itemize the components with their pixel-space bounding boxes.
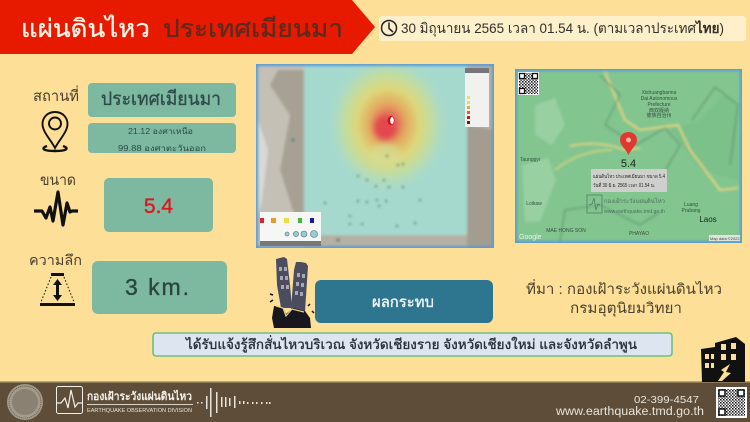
location map [515, 69, 742, 243]
icon: clock [382, 20, 396, 36]
date text: 30 มิถุนายน 2565 เวลา 01.54 น. (ตามเวลาประเทศไทย) [401, 19, 724, 37]
intensity legend [465, 68, 489, 127]
division name english: EARTHQUAKE OBSERVATION DIVISION [87, 408, 192, 414]
map caption box: วันที่ 30 มิ.ย. 2565 เวลา 01.54 น. [593, 182, 655, 189]
division logo icon [56, 386, 82, 414]
panel: impact [315, 280, 493, 323]
impact description banner: ได้รับแจ้งรู้สึกสั่นไหวบริเวณ จังหวัดเชียงราย จังหวัดเชียงใหม่ และจังหวัดลำพูน [185, 335, 637, 353]
map place labels: Xishuangbanna [642, 90, 677, 96]
map pin [620, 132, 637, 155]
panel: depth: 3 km. [125, 274, 189, 300]
panel: coordinates [88, 123, 236, 153]
icon: depth [40, 273, 75, 306]
icon: seismic wave [34, 192, 78, 225]
header banner [0, 0, 375, 54]
map place labels: Loikaw [526, 201, 542, 207]
map place labels: Prabang [682, 208, 701, 214]
department seal [7, 384, 43, 420]
map place labels: PHAYAO [629, 231, 649, 237]
panel: impact: ผลกระทบ [372, 294, 434, 311]
panel: magnitude: 5.4 [144, 195, 173, 218]
map credit: Map data ©2022 [710, 236, 740, 241]
QR code: footer [716, 387, 747, 418]
QR code: map [518, 72, 539, 95]
map watermark: www.earthquake.tmd.go.th [604, 209, 665, 215]
source text: กรมอุตุนิยมวิทยา [570, 301, 682, 317]
map caption box: แผ่นดินไหว ประเทศเมียนมา ขนาด 5.4 [593, 173, 665, 180]
footer bar [0, 381, 750, 422]
map watermark: กองเฝ้าระวังแผ่นดินไหว [604, 197, 665, 205]
panel: country [88, 83, 236, 117]
source text [526, 279, 722, 317]
map magnitude: 5.4 [621, 158, 636, 170]
Google mark: Google [519, 234, 542, 241]
sound wave decoration [197, 388, 270, 417]
panel: coordinates: 21.12 องศาเหนือ [128, 127, 193, 136]
map place labels [520, 90, 701, 237]
website: www.earthquake.tmd.go.th [555, 406, 704, 418]
map place labels: Taunggyi [520, 157, 540, 163]
icon: cracked building [701, 337, 745, 382]
icon: location pin [42, 112, 68, 151]
source text: ที่มา : กองเฝ้าระวังแผ่นดินไหว [526, 279, 722, 298]
epicentre intensity map [256, 64, 494, 248]
map place labels: 傣族自治州 [646, 112, 672, 119]
date bar [379, 16, 746, 41]
icon: collapsing buildings [270, 257, 314, 328]
impact description banner [153, 333, 672, 356]
location label: สถานที่ [33, 85, 79, 105]
title: country: ประเทศเมียนมา [163, 15, 343, 43]
division name: กองเฝ้าระวังแผ่นดินไหว [87, 389, 192, 403]
panel: depth [92, 261, 227, 314]
map place labels: MAE HONG SON [546, 228, 586, 234]
label: Laos: Laos [699, 215, 717, 224]
depth and magnitude legend [260, 212, 321, 246]
map watermark [587, 195, 665, 215]
depth label: ความลึก [29, 252, 82, 268]
map place labels: 西双版纳 [649, 107, 669, 114]
map caption box [591, 169, 667, 192]
panel: coordinates: 99.88 องศาตะวันออก [118, 144, 206, 153]
map place labels: Prefecture [647, 102, 671, 108]
panel: magnitude [104, 178, 213, 232]
magnitude label: ขนาด [40, 172, 76, 189]
phone number: 02-399-4547 [634, 394, 699, 406]
panel: country: ประเทศเมียนมา [101, 88, 221, 110]
map place labels: Luang [684, 202, 698, 208]
title: earthquake: แผ่นดินไหว [21, 14, 150, 43]
map place labels: Dai Autonomous [641, 96, 678, 102]
epicentre marker [388, 116, 394, 125]
